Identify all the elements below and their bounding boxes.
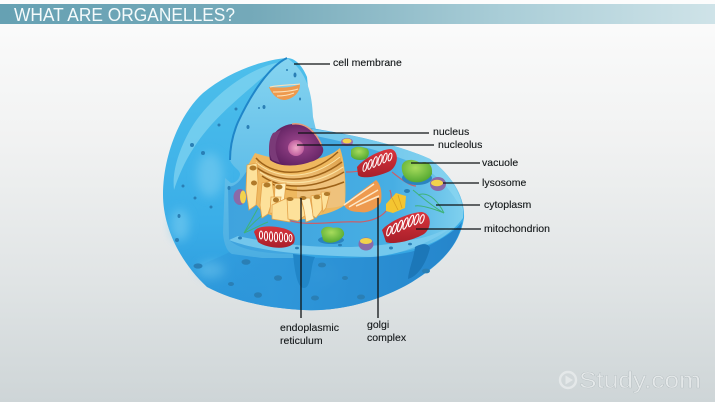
- label: endoplasmic reticulum: [280, 198, 339, 347]
- red reticulum strands: [278, 171, 416, 223]
- top green vacuole: [351, 147, 369, 160]
- top small lysosome: [341, 138, 353, 146]
- label: golgi complex: complex: [367, 332, 407, 344]
- label: endoplasmic reticulum: endoplasmic: [280, 322, 339, 334]
- mitochondrion upper: [357, 149, 397, 177]
- floor pale back rim: [312, 129, 463, 212]
- label: endoplasmic reticulum: reticulum: [280, 335, 323, 347]
- label: golgi complex: [367, 198, 407, 344]
- label: mitochondrion: mitochondrion: [484, 223, 550, 235]
- label: cell membrane: cell membrane: [333, 57, 402, 69]
- watermark: Study.com logo: Study.com: [579, 367, 701, 393]
- bottom lysosome: [358, 238, 374, 250]
- label: vacuole: vacuole: [482, 157, 518, 169]
- cell outer shell: [163, 58, 464, 310]
- green cytoskeleton: [244, 190, 444, 233]
- yellow organelle: [386, 193, 406, 213]
- label: lysosome: [443, 177, 527, 189]
- folds in front wall: [293, 254, 315, 288]
- nucleolus: [288, 140, 304, 156]
- soft shell patches: [171, 153, 341, 284]
- golgi complex: [344, 180, 381, 212]
- label: nucleolus: nucleolus: [438, 139, 482, 151]
- label: cytoplasm: [436, 199, 532, 211]
- label: golgi complex: golgi: [367, 319, 389, 331]
- endoplasmic reticulum: [246, 148, 345, 222]
- lysosome right: [430, 177, 446, 191]
- lighter highlight on shell: [174, 62, 280, 190]
- label: cell membrane: [294, 57, 402, 69]
- cell floor: [228, 128, 463, 256]
- label: vacuole: [411, 157, 518, 169]
- play icon: [560, 372, 576, 388]
- pores on shell and wall: [175, 69, 430, 300]
- ER tubes: [246, 163, 330, 222]
- golgi on wall: [269, 84, 300, 100]
- bottom green vacuole: [318, 227, 344, 244]
- floor pale rim: [229, 218, 463, 257]
- title banner: [0, 4, 715, 25]
- cut wall: [223, 58, 316, 258]
- label: nucleus: nucleus: [433, 126, 469, 138]
- mitochondrion lower left: [254, 226, 295, 248]
- nucleus: [269, 124, 323, 166]
- label: cytoplasm: cytoplasm: [484, 199, 532, 211]
- left lysosome: [234, 189, 246, 205]
- label: mitochondrion: [416, 223, 550, 235]
- title: WHAT ARE ORGANELLES?: [14, 4, 235, 25]
- label: lysosome: lysosome: [482, 177, 527, 189]
- mitochondrion lower right: [382, 212, 430, 243]
- dark front lower shell: [190, 222, 462, 310]
- cell illustration: [163, 58, 464, 310]
- vacuole: [402, 160, 432, 185]
